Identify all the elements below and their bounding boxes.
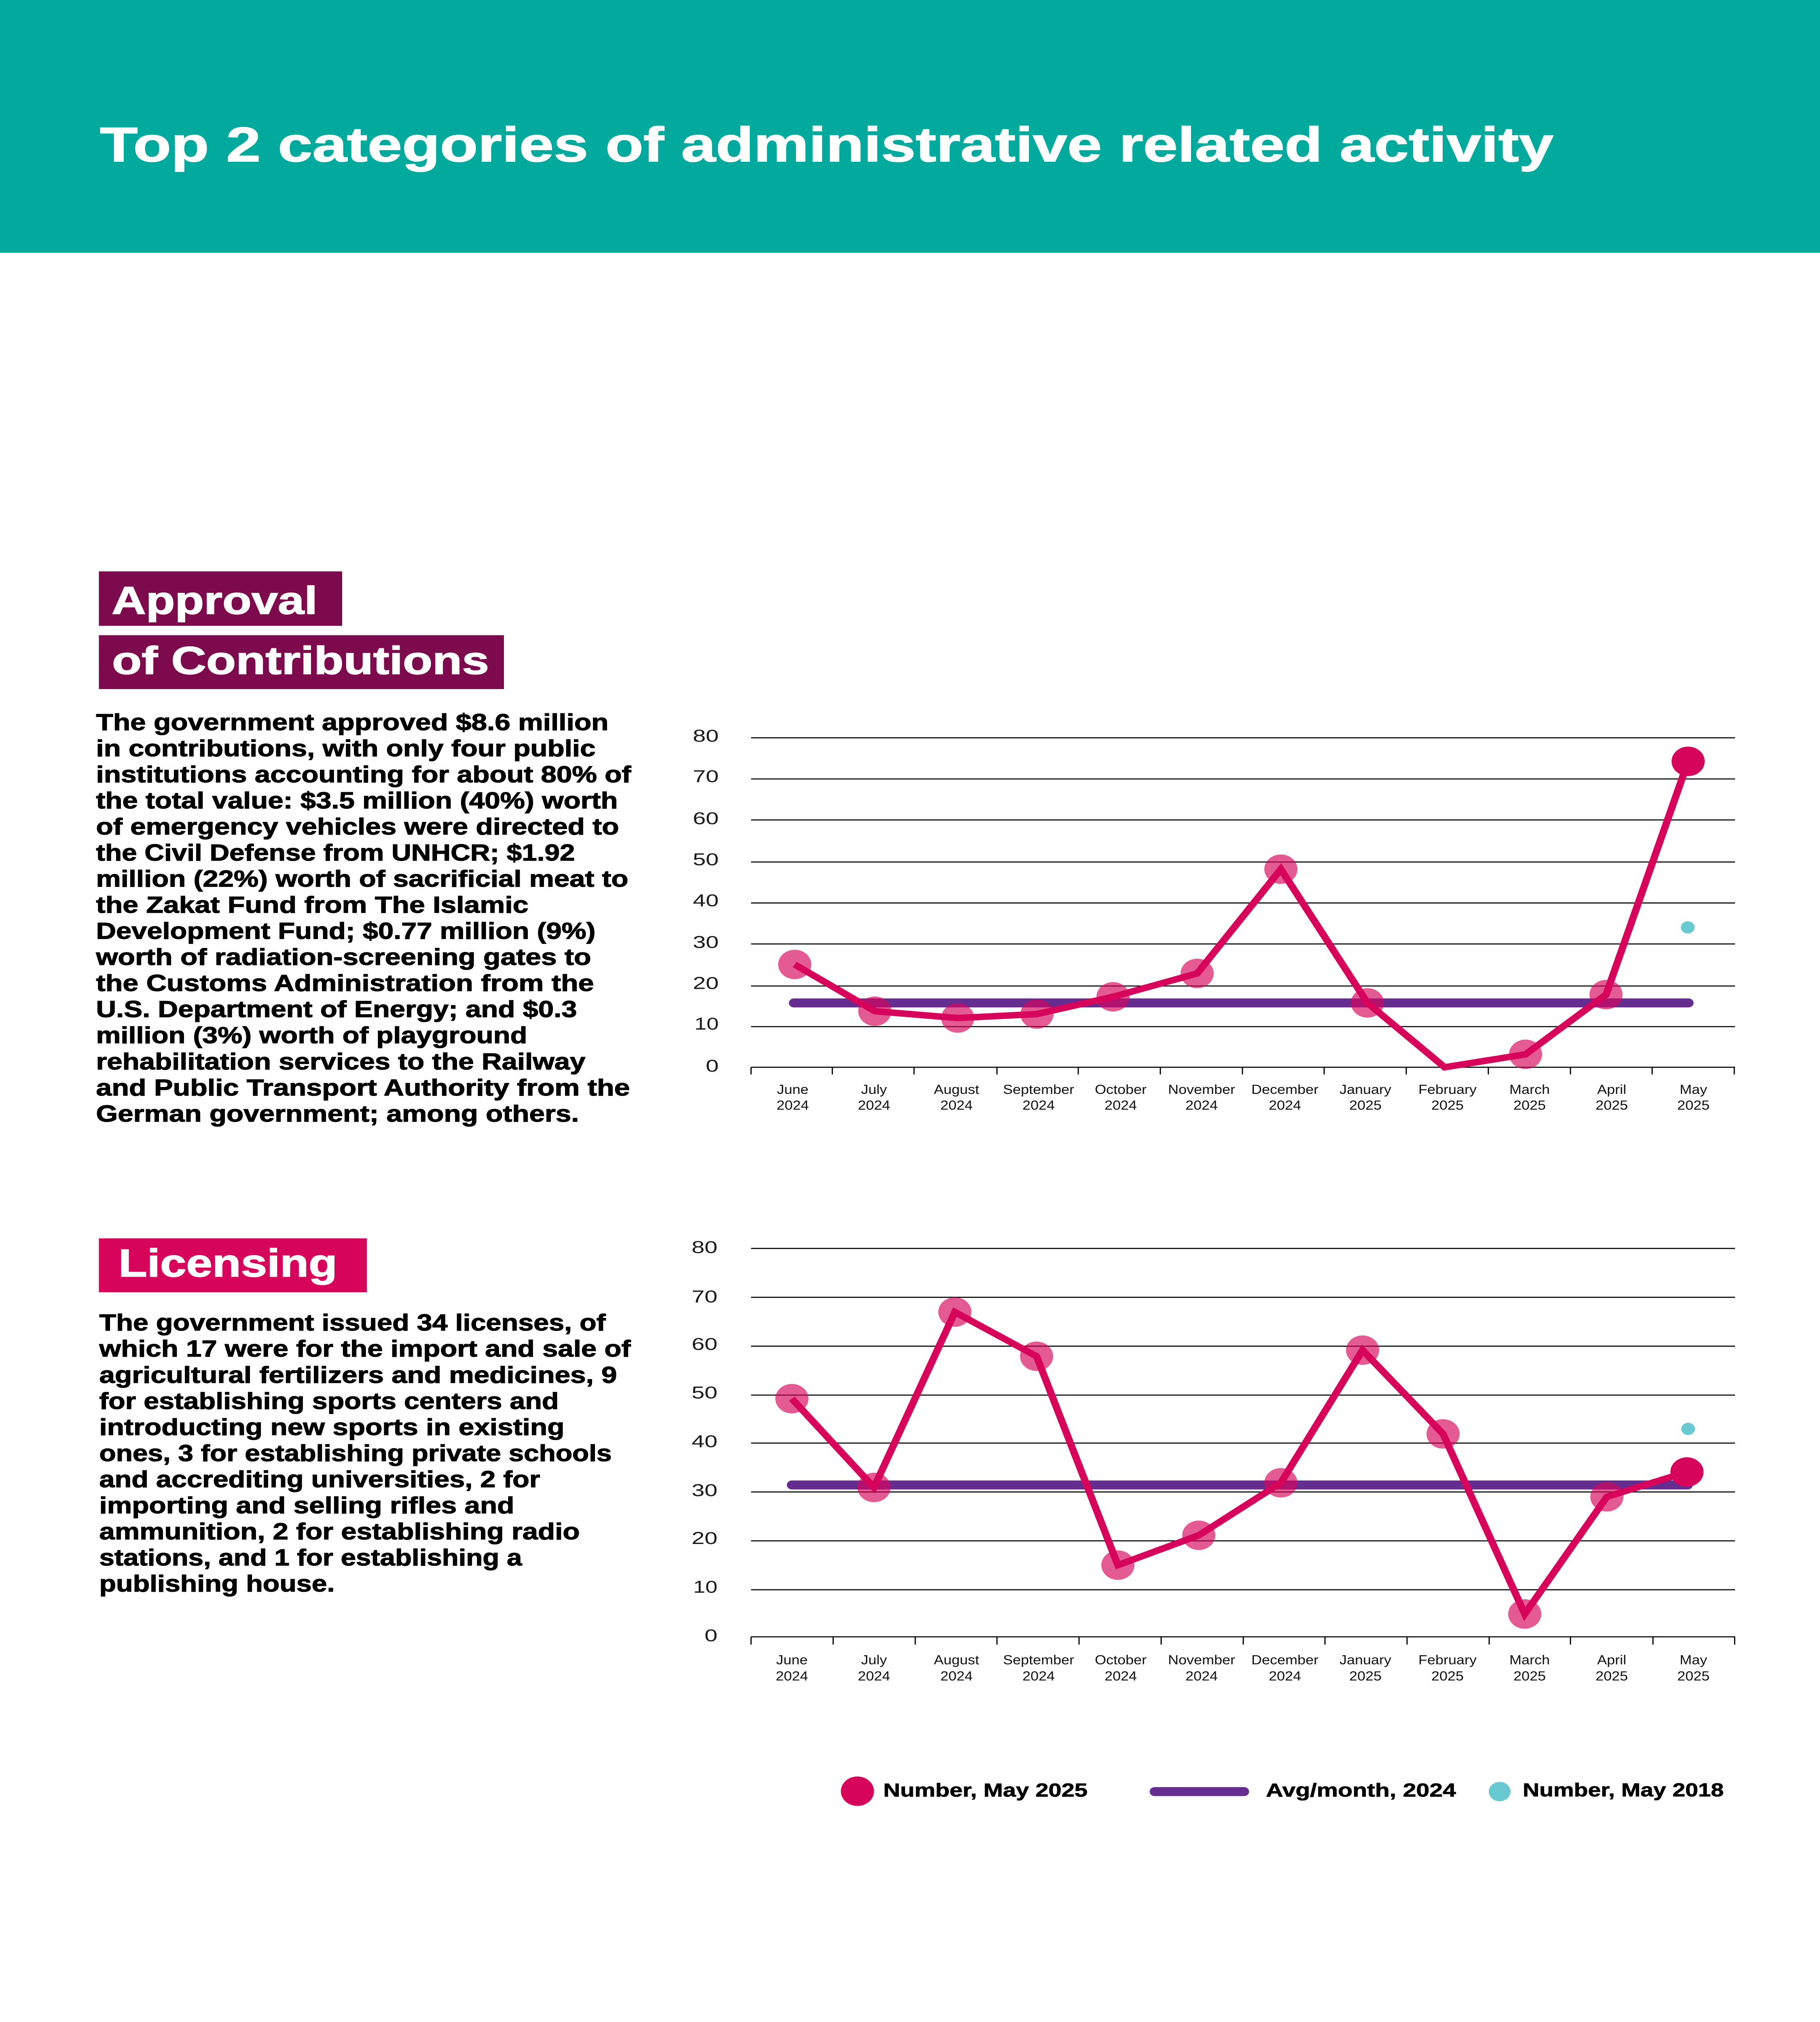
text block: licensing description: importing and selling rifles and [99, 1492, 514, 1519]
text block: licensing description: The government issued 34 licenses, of [99, 1310, 606, 1336]
text block: licensing description: for establishing sports centers and [99, 1388, 559, 1414]
heading: approval of contributions: of Contributions [112, 639, 489, 682]
legend: Avg/month, 2024 [1266, 1780, 1456, 1801]
legend: Number, May 2025 [883, 1780, 1088, 1801]
line chart: contributions: 2025 [1513, 1098, 1546, 1113]
title: Top 2 categories of administrative related activity [100, 118, 1553, 172]
line chart: contributions: September [1003, 1083, 1074, 1097]
line chart: contributions: 0 [706, 1056, 719, 1075]
text block: contributions description: rehabilitation services to the Railway [96, 1049, 585, 1074]
line chart: licensing: 60 [692, 1334, 717, 1354]
text block: licensing description: publishing house. [99, 1571, 334, 1597]
line chart: contributions: February [1418, 1083, 1477, 1097]
line chart: licensing: November [1168, 1653, 1235, 1667]
line chart: licensing: March [1509, 1653, 1550, 1667]
line chart: licensing: June [776, 1653, 808, 1667]
line chart: licensing: 50 [692, 1383, 717, 1402]
text block: licensing description: introducting new sports in existing [99, 1414, 565, 1440]
line chart: licensing: September [1003, 1653, 1074, 1667]
line chart: contributions [693, 726, 1735, 1113]
line chart: licensing: 2025 [1513, 1669, 1546, 1684]
line chart: licensing: 2024 [776, 1669, 808, 1684]
text block: contributions description: the Customs Administration from the [96, 970, 594, 996]
line chart: contributions: August [934, 1083, 980, 1097]
heading: licensing: Licensing [119, 1241, 337, 1285]
text block: contributions description: and Public Transport Authority from the [96, 1074, 630, 1101]
line chart: licensing: 10 [693, 1577, 717, 1597]
text block: contributions description: U.S. Department of Energy; and $0.3 [96, 996, 577, 1022]
text block: contributions description: the Civil Defense from UNHCR; $1.92 [96, 840, 575, 866]
line chart: contributions: June [777, 1083, 808, 1097]
panel: licensing [99, 1238, 631, 1597]
line chart: licensing: July [861, 1653, 887, 1667]
line chart: contributions: 60 [693, 809, 719, 828]
text block: licensing description: agricultural fertilizers and medicines, 9 [99, 1362, 617, 1388]
line chart: contributions: 2024 [1185, 1098, 1218, 1113]
line chart: licensing: 80 [692, 1237, 717, 1257]
text block: contributions description: worth of radiation-screening gates to [95, 944, 591, 970]
line chart: licensing: May [1680, 1653, 1707, 1667]
line chart: contributions: November [1168, 1083, 1235, 1097]
line chart: contributions: 10 [694, 1014, 719, 1033]
line chart: licensing: February [1418, 1653, 1477, 1667]
line chart: licensing: 2024 [1105, 1669, 1137, 1684]
text block: contributions description: million (22%) worth of sacrificial meat to [96, 866, 628, 892]
line chart: contributions: 20 [693, 973, 719, 993]
text block: contributions description: German government; among others. [96, 1101, 579, 1127]
text block: licensing description: which 17 were for the import and sale of [99, 1336, 631, 1362]
line chart: contributions: 2024 [1105, 1098, 1137, 1113]
panel: approval of contributions [95, 571, 631, 1127]
text block: contributions description: million (3%) worth of playground [96, 1022, 527, 1049]
line chart: contributions: December [1251, 1083, 1318, 1097]
line chart: contributions: October [1095, 1083, 1147, 1097]
text block: contributions description: the Zakat Fund from The Islamic [96, 892, 529, 918]
line chart: licensing: 0 [705, 1626, 717, 1645]
line chart: licensing: January [1340, 1653, 1391, 1667]
line chart: contributions: 2025 [1677, 1098, 1710, 1113]
line chart: contributions: 2025 [1431, 1098, 1464, 1113]
line chart: contributions: 2025 [1596, 1098, 1628, 1113]
header banner [0, 0, 1820, 253]
line chart: contributions: 2024 [1269, 1098, 1301, 1113]
text block: licensing description: ammunition, 2 for establishing radio [99, 1519, 580, 1545]
line chart: licensing [692, 1237, 1735, 1684]
line chart: contributions: January [1340, 1083, 1391, 1097]
text block: contributions description: the total value: $3.5 million (40%) worth [96, 787, 618, 814]
line chart: licensing: 2024 [1022, 1669, 1055, 1684]
line chart: contributions: April [1597, 1083, 1626, 1097]
line chart: licensing: 2025 [1431, 1669, 1464, 1684]
text block: licensing description: and accrediting universities, 2 for [99, 1466, 540, 1493]
heading: approval of contributions [99, 571, 504, 689]
text block: contributions description: in contributions, with only four public [96, 735, 595, 761]
text block: contributions description [95, 709, 631, 1127]
line chart: licensing: December [1251, 1653, 1318, 1667]
line chart: licensing: 2025 [1677, 1669, 1710, 1684]
line chart: licensing: August [934, 1653, 980, 1667]
line chart: contributions: May [1680, 1083, 1707, 1097]
line chart: licensing: 2024 [1185, 1669, 1218, 1684]
line chart: licensing: 2025 [1596, 1669, 1628, 1684]
text block: contributions description: Development Fund; $0.77 million (9%) [96, 918, 595, 944]
line chart: licensing: 40 [692, 1432, 717, 1451]
line chart: contributions: 70 [693, 767, 719, 786]
line chart: licensing: 2025 [1349, 1669, 1382, 1684]
text block: contributions description: The government approved $8.6 million [96, 709, 608, 735]
line chart: contributions: 2024 [777, 1098, 809, 1113]
line chart: contributions: 2024 [940, 1098, 973, 1113]
line chart: contributions: 2024 [1022, 1098, 1055, 1113]
line chart: contributions: 80 [693, 726, 719, 745]
line chart: licensing: 2024 [858, 1669, 890, 1684]
line chart: licensing: April [1597, 1653, 1626, 1667]
text block: contributions description: of emergency vehicles were directed to [96, 814, 619, 840]
line chart: contributions: 30 [693, 932, 719, 952]
text block: contributions description: institutions accounting for about 80% of [96, 761, 631, 788]
line chart: contributions: 50 [693, 850, 719, 869]
line chart: contributions: March [1509, 1083, 1550, 1097]
text block: licensing description: ones, 3 for establishing private schools [99, 1440, 612, 1466]
line chart: licensing: 2024 [1269, 1669, 1301, 1684]
legend [841, 1777, 1724, 1806]
heading: approval of contributions: Approval [112, 579, 317, 622]
heading: licensing [99, 1238, 367, 1292]
text block: licensing description: stations, and 1 for establishing a [99, 1544, 522, 1571]
line chart: contributions: 2025 [1349, 1098, 1382, 1113]
line chart: licensing: October [1095, 1653, 1147, 1667]
line chart: contributions: 40 [693, 890, 719, 910]
line chart: contributions: 2024 [858, 1098, 890, 1113]
line chart: licensing: 2024 [940, 1669, 973, 1684]
line chart: licensing: 20 [692, 1528, 717, 1548]
line chart: licensing: 30 [692, 1481, 717, 1500]
text block: licensing description [99, 1310, 631, 1597]
line chart: contributions: July [861, 1083, 887, 1097]
legend: Number, May 2018 [1523, 1779, 1724, 1800]
line chart: licensing: 70 [692, 1287, 717, 1306]
